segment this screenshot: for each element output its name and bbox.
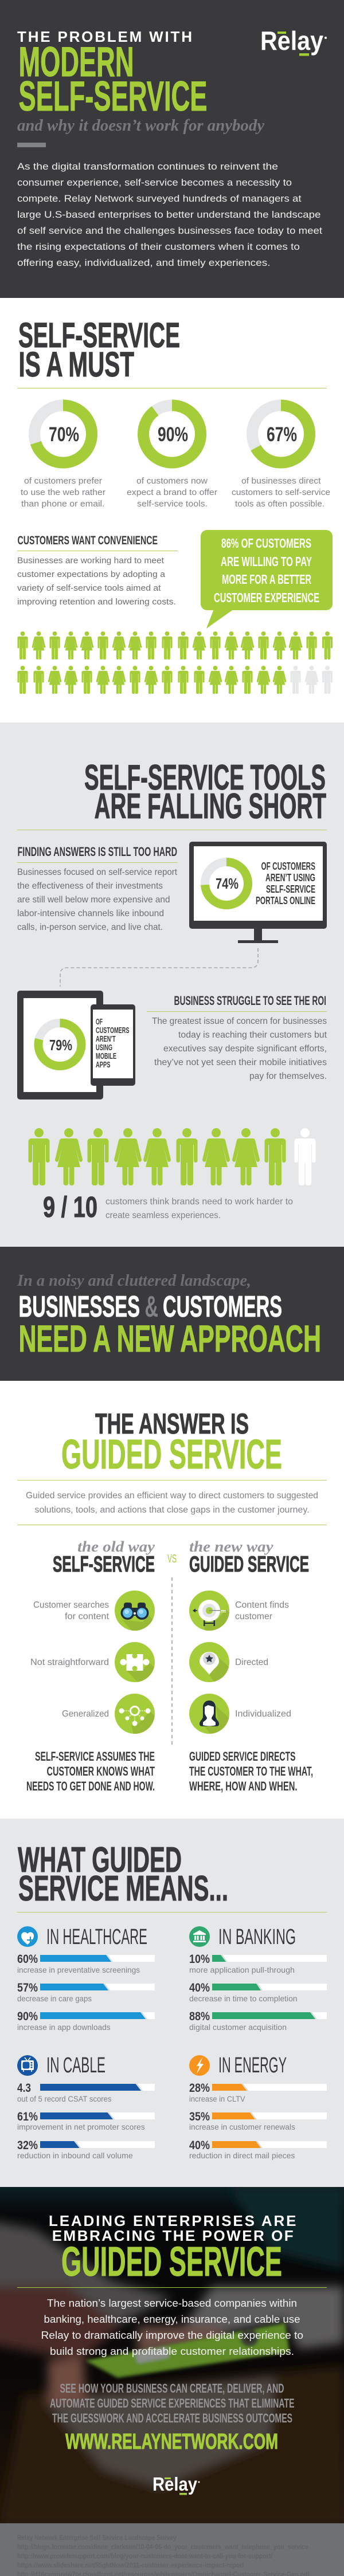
heading [61,1408,282,1478]
pictogram: 86 of 100 people, row 2 [17,666,333,694]
icon: heart plus [17,1926,38,1947]
block: healthcare [17,1925,155,2032]
heading: leading enterprises: EMBRACING THE POWER OF [52,2227,294,2244]
block: energy: increase in customer renewals [189,2122,295,2131]
pictogram: 9 of 10 people [29,1128,315,1185]
subheading: finding answers: FINDING ANSWERS IS STILL TOO HARD [17,845,177,859]
description: Guided service provides an efficient way to direct customers to suggested [26,1491,318,1501]
block: banking: 88% [189,2009,210,2023]
background: blurred hand holding phone photo [0,2187,344,2523]
icon: desktop monitor with 74% donut: SELF-SERVICE [266,883,315,895]
summary: self-service [26,1749,155,1793]
banner heading: & [144,1290,158,1324]
donut captions: of businesses direct [241,477,321,486]
icon: tablet and phone with 79% donut: OF [96,1018,103,1027]
label: directed: Directed [235,1658,268,1667]
intro paragraph: consumer experience, self-service becomes a necessity to [17,177,292,188]
block: cable: out of 5 record CSAT scores [17,2094,111,2103]
heading: IS A MUST [18,345,134,384]
block: banking: decrease in time to completion [189,1994,298,2003]
paragraph: enterprises: The nation’s largest service-based companies within [47,2298,297,2309]
column header: the old way: SELF-SERVICE [53,1552,155,1577]
donut captions: of customers now [136,477,208,486]
label: content finds customer [235,1600,289,1621]
block: healthcare: decrease in care gaps [17,1994,92,2003]
donut captions: tools as often possible. [235,500,325,509]
icon: network nodes [115,1694,155,1734]
icon: tablet and phone with 79% donut: CUSTOMERS [96,1026,130,1035]
logo: Relay footer: Relay [153,2473,198,2495]
call to action text [50,2381,295,2425]
paragraph: finding answers [17,867,178,932]
block: banking: 40% [189,1981,210,1994]
donut captions: self-service tools. [137,500,208,509]
logo: Relay: Relay [260,26,323,56]
label: individualized: Individualized [235,1709,291,1719]
block: banking: digital customer acquisition [189,2023,287,2032]
donut captions [21,477,330,509]
stat: 9 / 10: 9 / 10 [43,1191,97,1223]
icon: binoculars [115,1591,155,1631]
block: cable: improvement in net promoter scores [17,2122,145,2131]
block: cable: 4.3 [17,2081,31,2095]
intro paragraph: As the digital transformation continues to reinvent the [17,161,278,172]
icon: desktop monitor with 74% donut: OF CUSTOMERS [261,861,315,872]
intro paragraph [17,161,322,268]
icon: tablet and phone with 79% donut: AREN’T [96,1035,116,1044]
title kicker: THE PROBLEM WITH [17,28,192,45]
label: content finds customer: Content finds [235,1600,289,1610]
donut captions: expect a brand to offer [127,488,217,497]
block: healthcare: 57% [17,1981,38,1994]
block: energy: 35% [189,2110,210,2123]
callout: 86% of customers [201,530,333,629]
paragraph: convenience: Businesses are working hard to meet [17,556,165,566]
stat caption: create seamless experiences. [105,1211,221,1220]
intro paragraph: offering easy, individualized, and timely experiences. [17,257,270,268]
label: not straightforward: Not straightforward [30,1658,109,1667]
title: MODERN [18,39,134,85]
paragraph: enterprises: build strong and profitable customer relationships. [50,2346,294,2357]
icon: tablet and phone with 79% donut: APPS [96,1061,111,1070]
icon: desktop monitor with 74% donut: AREN’T USING [265,872,315,883]
block: cable: 32% [17,2138,38,2152]
subheading: customers want convenience: CUSTOMERS WANT CONVENIENCE [17,534,158,547]
panel: self-service tools are falling short [0,722,344,1247]
paragraph: enterprises: banking, healthcare, energy, insurance, and cable use [44,2314,300,2325]
icon: television [17,2055,38,2076]
description [26,1491,318,1515]
paragraph: convenience: improving retention and lowering costs. [17,597,176,607]
block: healthcare: increase in preventative screenings [17,1965,140,1974]
paragraph: business struggle: they’ve not yet seen their mobile initiatives [154,1058,327,1067]
paragraph: finding answers: are still well below more expensive and [17,895,170,905]
donut captions: of customers prefer [24,477,102,486]
banner lead-in: In a noisy and cluttered landscape, [17,1271,251,1290]
block: healthcare: 60% [17,1952,38,1966]
heading: SERVICE MEANS... [18,1869,228,1909]
donut: 90%: 90% [158,423,188,446]
summary: self-service: SELF-SERVICE ASSUMES THE [35,1749,155,1764]
block: energy: 28% [189,2081,210,2095]
block: healthcare: IN HEALTHCARE [46,1925,147,1949]
paragraph: enterprises [41,2298,303,2357]
icon: desktop monitor with 74% donut: 74% [216,875,239,892]
block: banking: more application pull-through [189,1965,295,1974]
block: energy: reduction in direct mail pieces [189,2151,295,2160]
banner heading: BUSINESSES [18,1290,140,1324]
block: energy [189,2053,327,2160]
heading: WHAT GUIDED [18,1840,182,1880]
panel: sources footer: Relay Network Enterprise Self Service Landscape Survey [17,2534,177,2542]
label: content finds customer: customer [235,1612,273,1621]
column header: the new way: the new way [189,1538,273,1555]
paragraph: convenience: customer expectations by adopting a [17,570,166,579]
title: SELF-SERVICE [18,73,208,120]
paragraph: finding answers: Businesses focused on self-service report [17,867,178,877]
panel: need a new approach banner [0,1247,344,1381]
block: energy: IN ENERGY [218,2053,287,2078]
title [18,39,208,120]
paragraph: business struggle: executives say despite significant efforts, [163,1044,327,1054]
heading: THE ANSWER IS [95,1408,249,1440]
block: cable [17,2053,155,2160]
intro paragraph: the rising expectations of their customers when it comes to [17,241,300,252]
vs label: VS [167,1553,177,1565]
pictogram: 86 of 100 people, row 1 [17,631,333,659]
paragraph: business struggle: The greatest issue of concern for businesses [152,1016,327,1026]
block: cable: reduction in inbound call volume [17,2151,133,2160]
summary: self-service: CUSTOMER KNOWS WHAT [47,1764,155,1778]
column header: the new way [189,1538,309,1577]
donut captions: than phone or email. [21,500,104,509]
block: healthcare: increase in app downloads [17,2023,111,2032]
panel: sources footer: http://blogs.forrester.com/diane_clarkson/10-04-06-do_your_customers_want_telephone_you_service [17,2543,308,2551]
panel: sources footer [0,2523,344,2576]
panel: what guided service means [0,1819,344,2187]
block: cable: IN CABLE [46,2053,105,2078]
stat caption [105,1197,293,1220]
label: generalized: Generalized [62,1709,109,1719]
block: cable: 61% [17,2110,38,2123]
icon: tablet and phone with 79% donut: USING [96,1043,112,1053]
paragraph: finding answers: calls, in-person service, and live chat. [17,922,163,932]
paragraph: convenience: variety of self-service tools aimed at [17,583,161,593]
summary: guided service [189,1749,313,1793]
label: customer searches for content: Customer searches [33,1600,109,1610]
panel: intro header [0,0,344,298]
icon: desktop monitor with 74% donut: PORTALS ONLINE [256,895,315,906]
icon: puzzle piece [115,1642,155,1682]
block: energy: 40% [189,2138,210,2152]
donut: 67% [252,406,310,463]
panel: sources footer: http://www.providesupport.com/blog/your-customers-dont-want-to-call-you-for-support/ [17,2552,273,2560]
heading: leading enterprises [49,2212,296,2285]
icon: tablet and phone with 79% donut: 79% [49,1036,72,1054]
icon: tablet and phone with 79% donut: MOBILE [96,1052,116,1061]
panel: the answer is guided service [17,1413,327,1792]
donut captions: to use the web rather [21,488,105,497]
column header: the old way [53,1538,155,1577]
icon: desktop monitor with 74% donut [189,842,327,943]
arrow: dashed connector [60,948,258,987]
paragraph: finding answers: labor-intensive channels like inbound [17,909,164,918]
label: customer searches for content: for content [65,1612,110,1621]
icon: bank [189,1926,210,1947]
panel: call to action [0,2187,344,2523]
heading: SELF-SERVICE [18,316,180,355]
intro paragraph: of self service and the challenges businesses face today to meet [17,225,322,236]
paragraph: convenience [17,556,176,607]
heading [84,757,326,826]
description: solutions, tools, and actions that close gaps in the customer journey. [34,1505,310,1515]
summary: self-service: NEEDS TO GET DONE AND HOW. [26,1779,155,1793]
block: healthcare: 90% [17,2009,38,2023]
icon: tablet and phone with 79% donut [17,991,135,1099]
block: banking: IN BANKING [218,1925,296,1949]
icon: woman portrait [189,1694,229,1734]
panel: sources footer: https://www.slideshare.net/RightNow/2011-customer-experience-impact-report [17,2561,244,2569]
panel: self-service is a must [0,298,344,722]
subtitle: and why it doesn’t work for anybody [17,116,264,135]
paragraph: business struggle [152,1016,327,1081]
heading [18,1840,228,1909]
block: banking: 10% [189,1952,210,1966]
stat caption: customers think brands need to work harder to [105,1197,293,1207]
column header: the old way: the old way [77,1538,155,1555]
donut: 90% [143,406,201,463]
banner heading [18,1290,321,1360]
block: banking [189,1925,327,2032]
heading [18,316,180,384]
icon: target and arrow [189,1591,229,1631]
donut captions: customers to self-service [232,488,330,497]
intro paragraph: compete. Relay Network surveyed hundreds of managers at [17,193,302,204]
icon: lightning bolt [189,2055,210,2076]
paragraph: business struggle: today is reaching their customers but [178,1030,327,1040]
block: energy: increase in CLTV [189,2094,245,2103]
donut: 70% [34,406,92,463]
heading: leading enterprises: LEADING ENTERPRISES ARE [49,2212,296,2229]
paragraph: finding answers: the effectiveness of their investments [17,881,163,891]
paragraph: enterprises: Relay to dramatically improve the digital experience to [41,2330,303,2341]
donut: 70%: 70% [49,423,79,446]
paragraph: business struggle: pay for themselves. [249,1071,327,1081]
donut: 67%: 67% [267,423,297,446]
intro paragraph: large U.S-based enterprises to better understand the landscape [17,209,321,220]
icon: map pin with star [189,1642,229,1682]
label: customer searches for content [33,1600,110,1621]
